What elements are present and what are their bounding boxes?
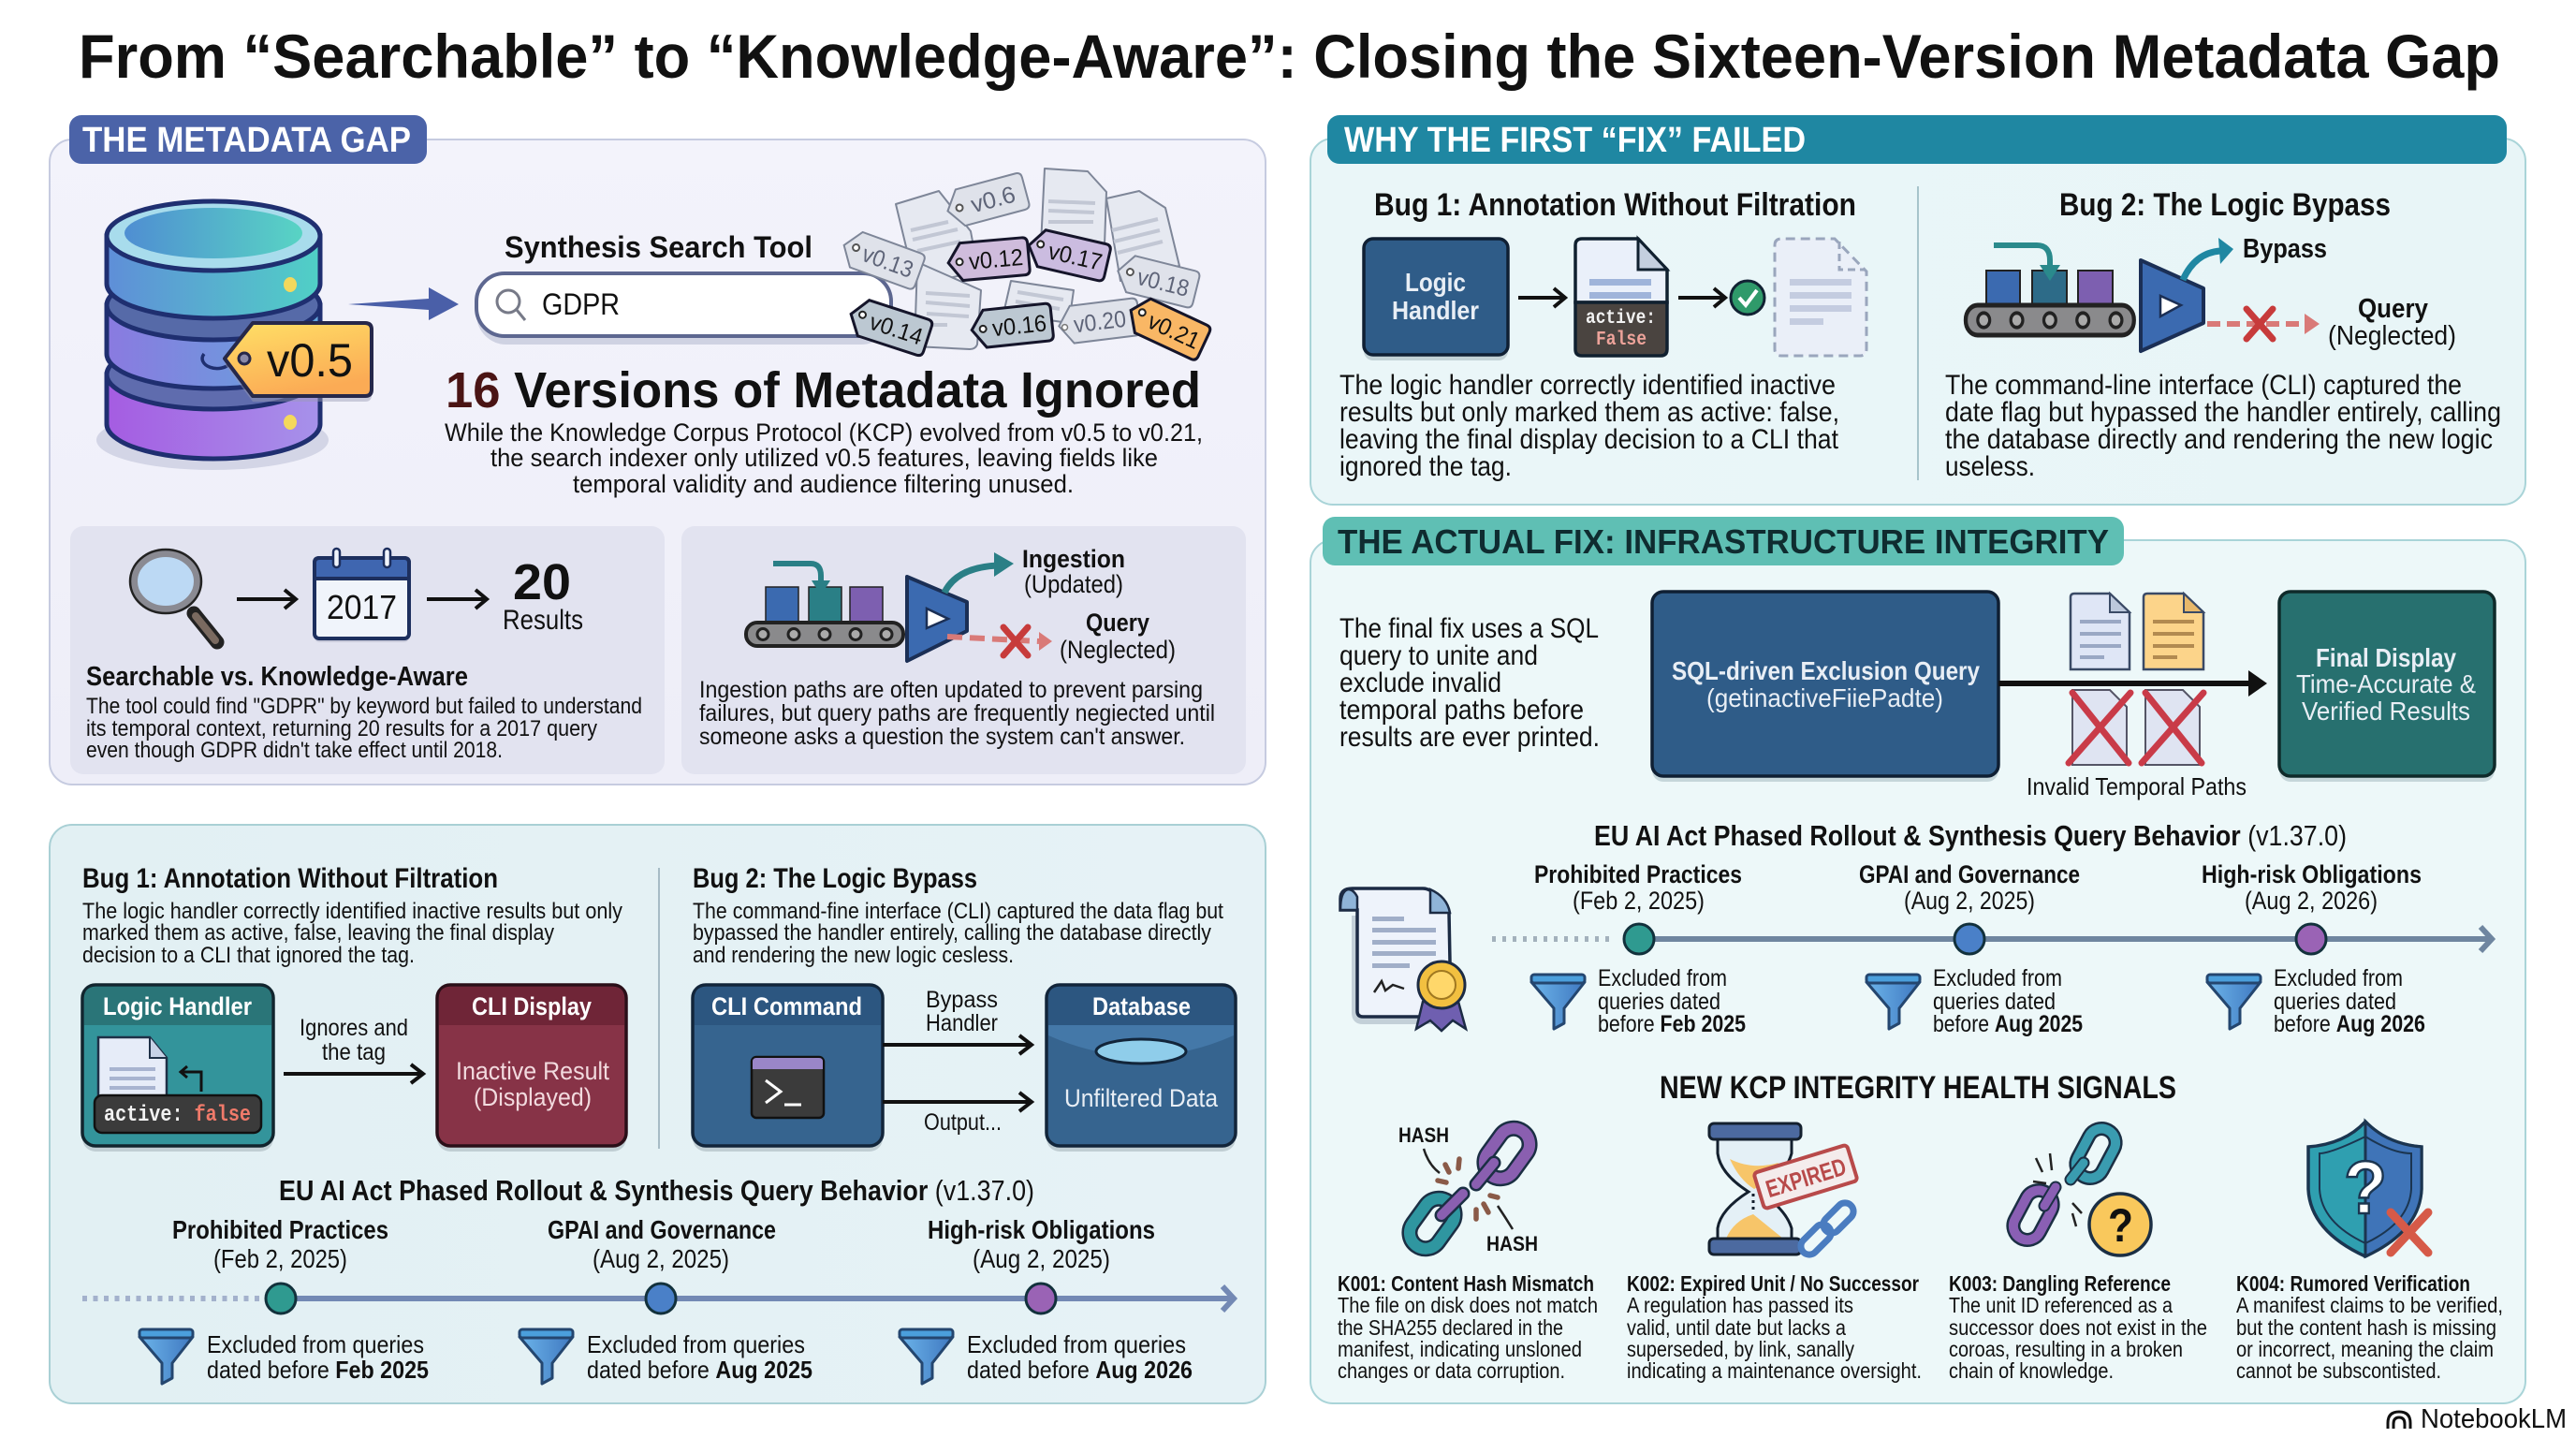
tag: v0.17: v0.17: [1046, 238, 1105, 276]
label: ingestion updated: Ingestion: [1022, 545, 1125, 573]
heading: bug 1: Bug 1: Annotation Without Filtration: [82, 863, 498, 894]
tag: v0.20: [1057, 298, 1141, 345]
arrow: ignores the tag: [284, 1015, 423, 1083]
signal: k001: the SHA255 declared in the: [1338, 1315, 1563, 1340]
signal: k001: The file on disk does not match: [1338, 1293, 1598, 1317]
icon: dashed ghost document: [1775, 239, 1866, 356]
stat: 20 results: 20: [513, 554, 571, 610]
text: bug 2: [1945, 370, 2501, 482]
signal: k002: A regulation has passed its: [1627, 1293, 1853, 1317]
label: query neglected: [2328, 294, 2456, 351]
icon: k001 broken chain with hash: [1398, 1123, 1538, 1255]
milestone: prohibited practices: Prohibited Practices: [1534, 860, 1742, 888]
milestone: gpai and governance: [548, 1215, 776, 1273]
signal: k003: coroas, resulting in a broken: [1949, 1337, 2183, 1361]
filter note: aug 2025: dated before Aug 2025: [587, 1356, 812, 1384]
signal: k002: K002: Expired Unit / No Successor: [1627, 1271, 1919, 1296]
signal: k003: chain of knowledge.: [1949, 1358, 2114, 1383]
tag: v0.16: v0.16: [991, 310, 1047, 342]
text: kcp explanation: the search indexer only utilized v0.5 features, leaving fields like: [490, 444, 1158, 472]
filter note: aug 2025: before Aug 2025: [1933, 1011, 2083, 1037]
heading tag: the metadata gap: THE METADATA GAP: [82, 121, 411, 160]
text: bug 1: The logic handler correctly identified inactive: [1339, 370, 1836, 401]
label: invalid temporal paths: Invalid Temporal Paths: [2027, 772, 2247, 800]
panel: the actual fix: [1310, 517, 2525, 1403]
label: ingestion updated: [1022, 545, 1125, 598]
text: bug 2: date flag but hypassed the handler entirely, calling: [1945, 397, 2501, 428]
filter note: aug 2026: Excluded from queries: [967, 1330, 1186, 1358]
box: cli command: [693, 985, 883, 1152]
icon: certificate scroll: [1340, 888, 1466, 1031]
arrows: bypass handler and output: Handler: [926, 1010, 998, 1036]
icon: k004 shield with question mark: [2308, 1122, 2428, 1256]
box: cli display: Inactive Result: [456, 1057, 609, 1085]
stat: 20 results: Results: [503, 605, 583, 636]
text: searchable explanation: [86, 694, 642, 763]
text: bug 2: The command-line interface (CLI) captured the: [1945, 370, 2462, 401]
tag: v0.18: [1113, 253, 1201, 309]
box: final display: Final Display: [2316, 643, 2456, 672]
arrow: [1518, 288, 1565, 307]
tag: v0.12: [946, 237, 1031, 282]
milestone: gpai and governance: GPAI and Governance: [1859, 860, 2080, 888]
heading: eu ai act rollout: EU AI Act Phased Rollout & Synthesis Query Behavior (v1.37.0): [1594, 819, 2347, 852]
timeline: [82, 1215, 1234, 1313]
tag: v0.6: [943, 172, 1031, 229]
tag: v0.18: v0.18: [1134, 264, 1192, 302]
text: searchable explanation: its temporal context, returning 20 results for a 2017 query: [86, 716, 597, 741]
milestone: high-risk obligations: [2202, 860, 2422, 915]
panel: ingestion vs query paths: [681, 526, 1246, 774]
tag: v0.21: [1123, 293, 1212, 361]
milestone: prohibited practices: (Feb 2, 2025): [1573, 887, 1705, 915]
text: bug 1: marked them as active, false, leaving the final display: [82, 920, 554, 946]
tag: v0.13: v0.13: [858, 241, 916, 284]
box: logic handler: Logic: [1405, 268, 1466, 297]
text: bug 2: the database directly and rendering the new logic: [1945, 424, 2493, 455]
tag: v0.17: [1025, 227, 1111, 282]
box: sql exclusion query: SQL-driven Exclusion Query: [1672, 656, 1980, 685]
tag: v0.12: v0.12: [968, 244, 1024, 275]
text: kcp explanation: [445, 418, 1203, 498]
heading tag: why the first fix failed: [1327, 115, 2507, 164]
tag: v0.20: v0.20: [1073, 306, 1128, 338]
signal: k001: changes or data corruption.: [1338, 1358, 1565, 1383]
filter note: aug 2025: queries dated: [1933, 989, 2056, 1015]
milestone: high-risk obligations: High-risk Obligations: [2202, 860, 2422, 888]
milestone: high-risk obligations: High-risk Obligations: [928, 1215, 1155, 1244]
heading: bug 1: Bug 1: Annotation Without Filtration: [1374, 187, 1856, 223]
arrow: ignores the tag: the tag: [322, 1039, 386, 1065]
search bar: [476, 273, 891, 345]
text: searchable explanation: even though GDPR didn't take effect until 2018.: [86, 738, 503, 763]
filter note: aug 2026: before Aug 2026: [2274, 1011, 2425, 1037]
arrow: ignores the tag: Ignores and: [300, 1015, 408, 1041]
icon: annotated document: [1575, 239, 1667, 356]
text: kcp explanation: While the Knowledge Corpus Protocol (KCP) evolved from v0.5 to v0.21,: [445, 418, 1203, 447]
signal: k003: [1949, 1271, 2207, 1383]
box: sql exclusion query: (getinactiveFiiePadte): [1706, 683, 1943, 712]
box: final display: Verified Results: [2302, 697, 2470, 726]
icon: invalid crossed documents: [2069, 690, 2203, 765]
signal: k003: The unit ID referenced as a: [1949, 1293, 2173, 1317]
milestone: high-risk obligations: (Aug 2, 2026): [2245, 887, 2378, 915]
box: sql exclusion query: [1652, 592, 1998, 782]
arrows: bypass handler and output: Bypass: [926, 987, 998, 1013]
box: database: [1046, 985, 1236, 1152]
icon: k003 dangling chain: ?: [2108, 1199, 2133, 1252]
arrows: bypass handler and output: Output...: [924, 1109, 1002, 1136]
icon: k001 broken chain with hash: HASH: [1486, 1232, 1538, 1255]
milestone: gpai and governance: (Aug 2, 2025): [593, 1244, 729, 1273]
signal: k004: but the content hash is missing: [2236, 1315, 2496, 1340]
box: logic handler: active: false: [104, 1103, 251, 1128]
label: ingestion updated: (Updated): [1024, 570, 1123, 598]
filter note: feb 2025: queries dated: [1598, 989, 1720, 1015]
text: ingestion explanation: [699, 677, 1215, 750]
timeline: [1492, 860, 2492, 954]
tag: v0.14: v0.14: [866, 309, 926, 350]
arrow: database to search: [348, 287, 459, 320]
signal: k002: superseded, by link, sanally: [1627, 1337, 1854, 1361]
filter note: feb 2025: dated before Feb 2025: [207, 1356, 429, 1384]
panel: the metadata gap: [50, 115, 1266, 785]
box: cli display: [437, 985, 626, 1152]
text: bug 1: decision to a CLI that ignored the tag.: [82, 943, 415, 968]
text: final fix summary: query to unite and: [1339, 640, 1538, 671]
panel: searchable vs knowledge-aware: [70, 526, 665, 774]
icon: k002 hourglass with expired stamp: EXPIRED: [1763, 1152, 1850, 1203]
text: bug 2: The command-fine interface (CLI) captured the data flag but: [693, 899, 1223, 924]
panel: why the first fix failed: [1310, 115, 2525, 505]
label: bypass: Bypass: [2243, 234, 2327, 264]
milestone: prohibited practices: [172, 1215, 388, 1273]
icon: calendar 2017: [315, 549, 409, 642]
arrow: [237, 590, 296, 609]
signal: k002: valid, until date but lacks a: [1627, 1315, 1846, 1340]
signal: k001: manifest, indicating unsloned: [1338, 1337, 1582, 1361]
filter note: aug 2025: [520, 1329, 812, 1384]
heading tag: the actual fix: THE ACTUAL FIX: INFRASTRUCTURE INTEGRITY: [1338, 522, 2109, 561]
label: query neglected: [1060, 609, 1176, 664]
icon: k001 broken chain with hash: HASH: [1398, 1123, 1449, 1147]
search bar: GDPR: [542, 287, 620, 321]
text: bug 1: results but only marked them as active: false,: [1339, 397, 1839, 428]
filter note: aug 2026: Excluded from: [2274, 965, 2403, 991]
filter note: aug 2026: dated before Aug 2026: [967, 1356, 1193, 1384]
signal: k001: [1338, 1271, 1598, 1383]
box: cli display: (Displayed): [474, 1083, 592, 1111]
tag: v0.16: [970, 303, 1054, 348]
title: From “Searchable” to “Knowledge-Aware”: Closing the Sixteen-Version Metadata Gap: [79, 22, 2500, 91]
box: logic handler: Logic Handler: [103, 992, 252, 1020]
filter note: aug 2026: [2207, 965, 2425, 1037]
text: bug 2: [693, 899, 1223, 968]
text: bug 1: The logic handler correctly identified inactive results but only: [82, 899, 622, 924]
text: bug 1: [82, 899, 622, 968]
heading: bug 2: Bug 2: The Logic Bypass: [693, 863, 977, 894]
icon: annotated document: False: [1596, 330, 1647, 351]
icon: k003 dangling chain: [2009, 1123, 2151, 1255]
box: logic handler: Handler: [1392, 296, 1479, 325]
box: logic handler: [1364, 239, 1508, 360]
milestone: gpai and governance: GPAI and Governance: [548, 1215, 776, 1244]
stat: 20 results: [503, 554, 583, 636]
arrows: bypass handler and output: [883, 987, 1032, 1136]
milestone: prohibited practices: (Feb 2, 2025): [213, 1244, 347, 1273]
box: database: Database: [1092, 992, 1191, 1020]
filter note: feb 2025: [1531, 965, 1746, 1037]
tag: v0.14: [845, 296, 933, 357]
signal: k004: [2236, 1271, 2503, 1383]
text: final fix summary: temporal paths before: [1339, 695, 1584, 726]
icon: annotated document: active:: [1586, 308, 1656, 330]
icon: database with v0.5 tag: v0.5: [267, 334, 353, 387]
box: final display: [2279, 592, 2495, 782]
heading tag: why the first fix failed: WHY THE FIRST “FIX” FAILED: [1344, 121, 1806, 160]
milestone: high-risk obligations: [928, 1215, 1155, 1273]
text: bug 1: leaving the final display decision to a CLI that: [1339, 424, 1839, 455]
heading: bug 2: Bug 2: The Logic Bypass: [2059, 187, 2391, 223]
panel: bugs and rollout (left): [50, 825, 1266, 1403]
heading: searchable vs knowledge-aware: Searchable vs. Knowledge-Aware: [86, 662, 468, 692]
icon: conveyor bypass: [1966, 238, 2320, 351]
icon: check mark: [1731, 281, 1764, 315]
label: synthesis search tool: Synthesis Search Tool: [505, 230, 812, 264]
signal: k003: successor does not exist in the: [1949, 1315, 2207, 1340]
icon: database with v0.5 tag: [96, 201, 372, 470]
signal: k004: cannot be subscontisted.: [2236, 1358, 2441, 1383]
watermark: notebooklm: NotebookLM: [2421, 1404, 2567, 1434]
box: cli command: CLI Command: [711, 992, 862, 1020]
tag: v0.6: v0.6: [968, 182, 1018, 218]
text: ingestion explanation: someone asks a question the system can't answer.: [699, 724, 1185, 750]
text: ingestion explanation: Ingestion paths are often updated to prevent parsing: [699, 677, 1203, 703]
signal: k003: K003: Dangling Reference: [1949, 1271, 2171, 1296]
signal: k002: [1627, 1271, 1922, 1383]
label: query neglected: (Neglected): [1060, 636, 1176, 664]
text: ingestion explanation: failures, but query paths are frequently negiected until: [699, 700, 1215, 726]
arrow: [1678, 288, 1725, 307]
filter note: feb 2025: before Feb 2025: [1598, 1011, 1746, 1037]
icon: magnifying glass: [130, 550, 217, 642]
text: kcp explanation: temporal validity and audience filtering unused.: [573, 470, 1074, 498]
milestone: gpai and governance: [1859, 860, 2080, 915]
heading: eu ai act rollout: EU AI Act Phased Rollout & Synthesis Query Behavior (v1.37.0): [279, 1174, 1034, 1207]
milestone: high-risk obligations: (Aug 2, 2025): [973, 1244, 1110, 1273]
filter note: aug 2026: [900, 1329, 1193, 1384]
signal: k004: K004: Rumored Verification: [2236, 1271, 2470, 1296]
heading: new kcp integrity health signals: NEW KCP INTEGRITY HEALTH SIGNALS: [1660, 1070, 2176, 1106]
headline: 16 versions ignored: 16 Versions of Metadata Ignored: [446, 362, 1201, 418]
text: bug 2: and rendering the new logic cesless.: [693, 943, 1014, 968]
text: final fix summary: exclude invalid: [1339, 668, 1501, 698]
tag: v0.13: [838, 227, 926, 290]
text: bug 2: useless.: [1945, 451, 2035, 482]
signal: k004: A manifest claims to be verified,: [2236, 1293, 2503, 1317]
box: final display: Time-Accurate &: [2296, 669, 2476, 698]
label: query neglected: (Neglected): [2328, 321, 2456, 351]
milestone: prohibited practices: [1534, 860, 1742, 915]
arrow: [427, 590, 487, 609]
milestone: prohibited practices: Prohibited Practices: [172, 1215, 388, 1244]
arrow: query to final display: [1998, 670, 2267, 697]
filter note: aug 2026: queries dated: [2274, 989, 2396, 1015]
filter note: feb 2025: Excluded from: [1598, 965, 1727, 991]
filter note: feb 2025: [139, 1329, 429, 1384]
text: bug 2: bypassed the handler entirely, calling the database directly: [693, 920, 1211, 946]
filter note: aug 2025: Excluded from queries: [587, 1330, 805, 1358]
box: database: Unfiltered Data: [1064, 1084, 1219, 1112]
signal: k002: indicating a maintenance oversight.: [1627, 1358, 1922, 1383]
filter note: aug 2025: [1866, 965, 2083, 1037]
label: query neglected: Query: [2358, 294, 2428, 324]
icon: valid documents: [2071, 594, 2203, 669]
icon: pile of documents and version tags: [838, 169, 1212, 361]
icon: conveyor with split paths: [746, 552, 1052, 661]
text: searchable explanation: The tool could find "GDPR" by keyword but failed to understand: [86, 694, 642, 719]
text: final fix summary: The final fix uses a SQL: [1339, 613, 1599, 644]
signal: k001: K001: Content Hash Mismatch: [1338, 1271, 1594, 1296]
icon: calendar 2017: 2017: [327, 588, 397, 626]
signal: k004: or incorrect, meaning the claim: [2236, 1337, 2494, 1361]
tag: v0.21: v0.21: [1144, 308, 1204, 355]
text: bug 1: [1339, 370, 1839, 482]
icon: k004 shield with question mark: ?: [2344, 1146, 2387, 1229]
milestone: gpai and governance: (Aug 2, 2025): [1904, 887, 2035, 915]
text: final fix summary: results are ever printed.: [1339, 722, 1600, 753]
text: final fix summary: [1339, 613, 1600, 753]
label: query neglected: Query: [1086, 609, 1149, 637]
text: bug 1: ignored the tag.: [1339, 451, 1512, 482]
box: logic handler: [82, 985, 273, 1152]
filter note: feb 2025: Excluded from queries: [207, 1330, 424, 1358]
box: cli display: CLI Display: [472, 992, 592, 1020]
icon: k002 hourglass with expired stamp: [1709, 1123, 1858, 1258]
filter note: aug 2025: Excluded from: [1933, 965, 2062, 991]
